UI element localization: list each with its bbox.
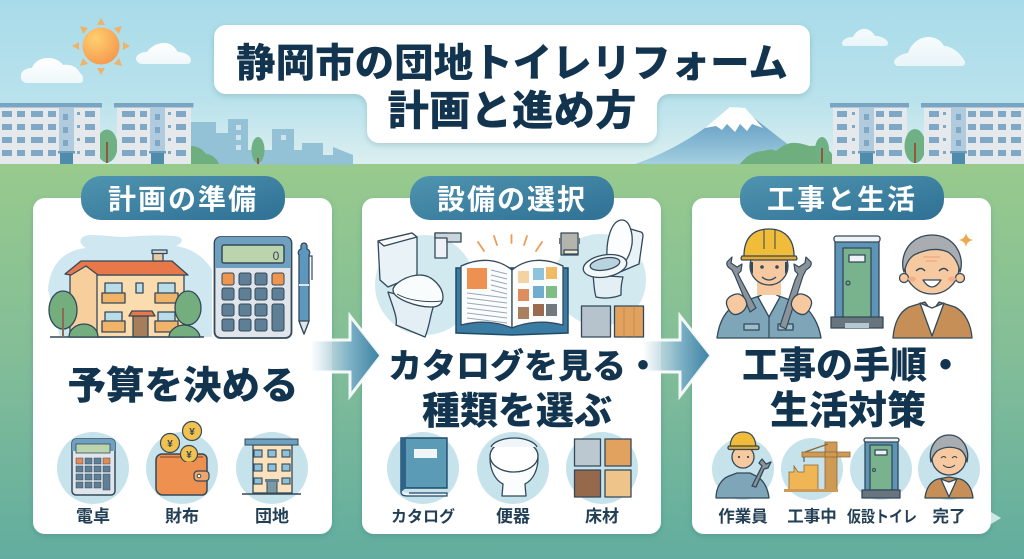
- icon: small elderly person: [918, 435, 980, 500]
- icon: tree between right buildings: [904, 129, 926, 163]
- illustration: toilet with open lid: [581, 220, 643, 298]
- icon: flooring samples: [566, 432, 638, 504]
- illustration: calculator: 0: [273, 249, 280, 263]
- label: complete: 完了: [932, 507, 966, 526]
- heading: construction steps and daily-life measures: [742, 345, 964, 433]
- label: wallet: 財布: [165, 507, 199, 526]
- heading: see the catalog and choose types: 種類を選ぶ: [422, 391, 612, 433]
- illustration: Mount Fuji: [635, 107, 790, 164]
- label: flooring: 床材: [585, 507, 619, 526]
- decorative sparkle at lower right: [991, 512, 1001, 524]
- icon: clouds right: [842, 29, 965, 66]
- swatches: floor tiles: [582, 306, 644, 337]
- icon: wallet with yen coins: ¥: [167, 439, 173, 450]
- icon: small apartment building: [236, 432, 308, 504]
- apartment building right 2: [921, 103, 1024, 164]
- icon: construction crane: [781, 438, 850, 500]
- section pill: construction and daily life: [740, 176, 944, 220]
- title line 2: 計画と進め方: [387, 87, 637, 134]
- title line 1: 静岡市の団地トイレリフォーム: [236, 42, 788, 86]
- apartment building left 1: [0, 103, 102, 164]
- sparkle: [959, 233, 973, 247]
- icon: catalog book: [387, 432, 459, 504]
- label: catalog: カタログ: [391, 507, 455, 526]
- label: toilet bowl: 便器: [496, 507, 530, 526]
- arrow: step two to step three: [642, 316, 711, 396]
- illustration: toilet with washlet: [378, 233, 443, 337]
- apartment building left 2: [114, 103, 194, 164]
- green ground background: [0, 164, 1024, 559]
- icon: open catalog book: [456, 235, 568, 335]
- icon: bush and trees left: [96, 130, 264, 164]
- illustration: calculator: [214, 237, 292, 338]
- illustration: smiling elderly person: [893, 233, 973, 338]
- label: apartment complex: 団地: [255, 507, 289, 526]
- sky background: [0, 0, 1024, 165]
- illustration: worker with wrenches: [717, 229, 821, 338]
- section pill: planning preparation: 計画の準備: [108, 184, 258, 215]
- heading: see the catalog and choose types: カタログを見る・: [388, 347, 660, 386]
- section pill: construction and daily life: 工事と生活: [767, 184, 917, 215]
- heading: decide the budget: 予算を決める: [67, 365, 299, 408]
- title card: [214, 25, 810, 143]
- icon: toilet bowl: [477, 432, 549, 504]
- icon: clouds left: [21, 43, 191, 83]
- trees and bushes: [49, 291, 201, 337]
- heading: see the catalog and choose types: [388, 347, 660, 433]
- label: under construction: 工事中: [787, 507, 837, 526]
- section pill: planning preparation: [81, 176, 285, 220]
- panel: equipment selection: [362, 198, 661, 534]
- icon: wallet with yen coins: ¥: [189, 427, 195, 438]
- illustration: portable toilet: [831, 236, 883, 328]
- heading: construction steps and daily-life measures: 工事の手順・: [742, 345, 964, 386]
- wrenches: [727, 257, 811, 329]
- panel: planning preparation: [33, 198, 332, 534]
- icon: small worker: [712, 432, 774, 500]
- icon: small portable toilet: [850, 438, 912, 500]
- icon: hills and trees right: [740, 137, 832, 164]
- icon: paper holder: [559, 233, 580, 255]
- icon: wallet with yen coins: ¥: [186, 450, 192, 461]
- icon: faucet: [435, 233, 461, 258]
- heading: construction steps and daily-life measures: 生活対策: [770, 390, 926, 433]
- sparkle rays: [478, 235, 542, 251]
- icon: sun: [72, 18, 130, 75]
- arrow: step one to step two: [310, 316, 381, 396]
- section pill: equipment selection: [410, 176, 614, 220]
- apartment building right 1: [830, 103, 909, 164]
- section pill: equipment selection: 設備の選択: [437, 184, 587, 215]
- icon: wallet with yen coins: [146, 422, 218, 504]
- icon: pen: [298, 243, 312, 334]
- panel: construction and daily life: [692, 198, 991, 534]
- background: distant city skyline: [191, 119, 353, 165]
- icon: small calculator: [57, 432, 129, 504]
- illustration: house: [48, 235, 212, 337]
- label: worker: 作業員: [718, 507, 768, 526]
- background blobs: [375, 234, 646, 335]
- label: temporary toilet: 仮設トイレ: [847, 508, 917, 526]
- label: calculator: 電卓: [76, 507, 110, 526]
